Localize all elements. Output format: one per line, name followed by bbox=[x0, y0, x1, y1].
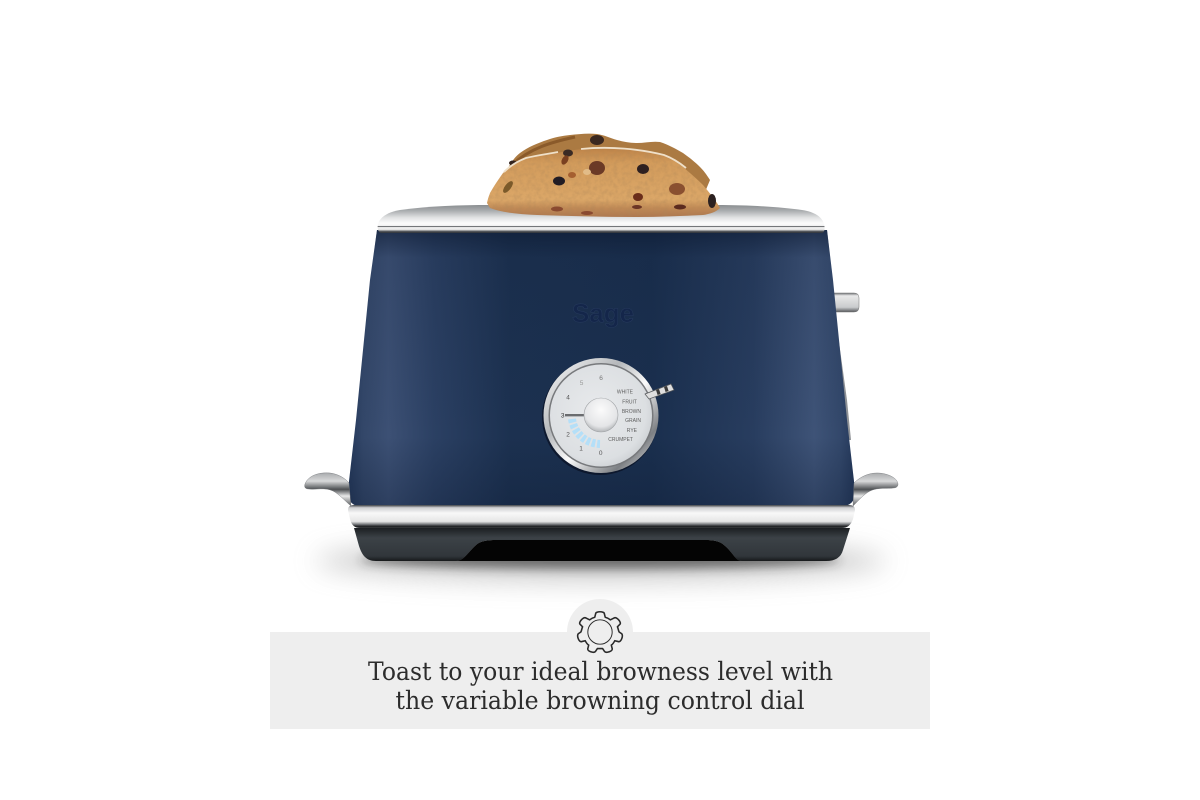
toaster body bbox=[348, 230, 855, 506]
browning control dial bbox=[542, 358, 674, 475]
caption text: the variable browning control dial bbox=[396, 686, 805, 715]
dial numbers: 2 bbox=[566, 432, 570, 438]
bread type labels: CRUMPET bbox=[608, 437, 633, 443]
dial lever bbox=[645, 384, 674, 399]
right side buttons bbox=[835, 335, 851, 440]
LED arc bbox=[572, 419, 600, 444]
dial pointer bbox=[565, 414, 587, 416]
bread type labels: BROWN bbox=[622, 409, 641, 415]
caption text: Toast to your ideal browness level with bbox=[368, 657, 833, 686]
dial knob bbox=[584, 398, 618, 432]
side lever bbox=[832, 293, 859, 312]
bread type labels: GRAIN bbox=[625, 418, 641, 424]
infographic canvas bbox=[270, 134, 930, 729]
right handle bbox=[853, 473, 898, 506]
bread type labels bbox=[608, 390, 641, 443]
bread slices bbox=[485, 134, 723, 219]
dark base bbox=[354, 528, 850, 561]
toaster illustration bbox=[305, 134, 898, 581]
under-base recess bbox=[456, 540, 742, 561]
floor shadow bbox=[316, 541, 886, 581]
dial numbers: 3 bbox=[561, 412, 565, 420]
back slice bbox=[507, 134, 710, 192]
bread type labels: FRUIT bbox=[622, 400, 637, 406]
dial numbers: 5 bbox=[580, 380, 584, 387]
dial numbers: 4 bbox=[566, 394, 570, 402]
dial numbers: 0 bbox=[599, 450, 603, 457]
front slice bbox=[487, 148, 720, 217]
left handle bbox=[305, 473, 351, 506]
dial numbers bbox=[561, 375, 603, 457]
base chrome band bbox=[348, 505, 855, 528]
caption text bbox=[368, 657, 833, 715]
raisins bbox=[501, 150, 716, 215]
dial numbers: 1 bbox=[579, 446, 583, 452]
icon: gear bbox=[578, 612, 622, 652]
top chrome lid bbox=[378, 205, 825, 233]
logo: Sage bbox=[572, 298, 634, 328]
caption panel bbox=[270, 599, 930, 729]
icon tab bbox=[567, 599, 633, 665]
bread type labels: RYE bbox=[627, 428, 638, 434]
bread type labels: WHITE bbox=[617, 390, 634, 396]
dial numbers: 6 bbox=[599, 375, 603, 382]
